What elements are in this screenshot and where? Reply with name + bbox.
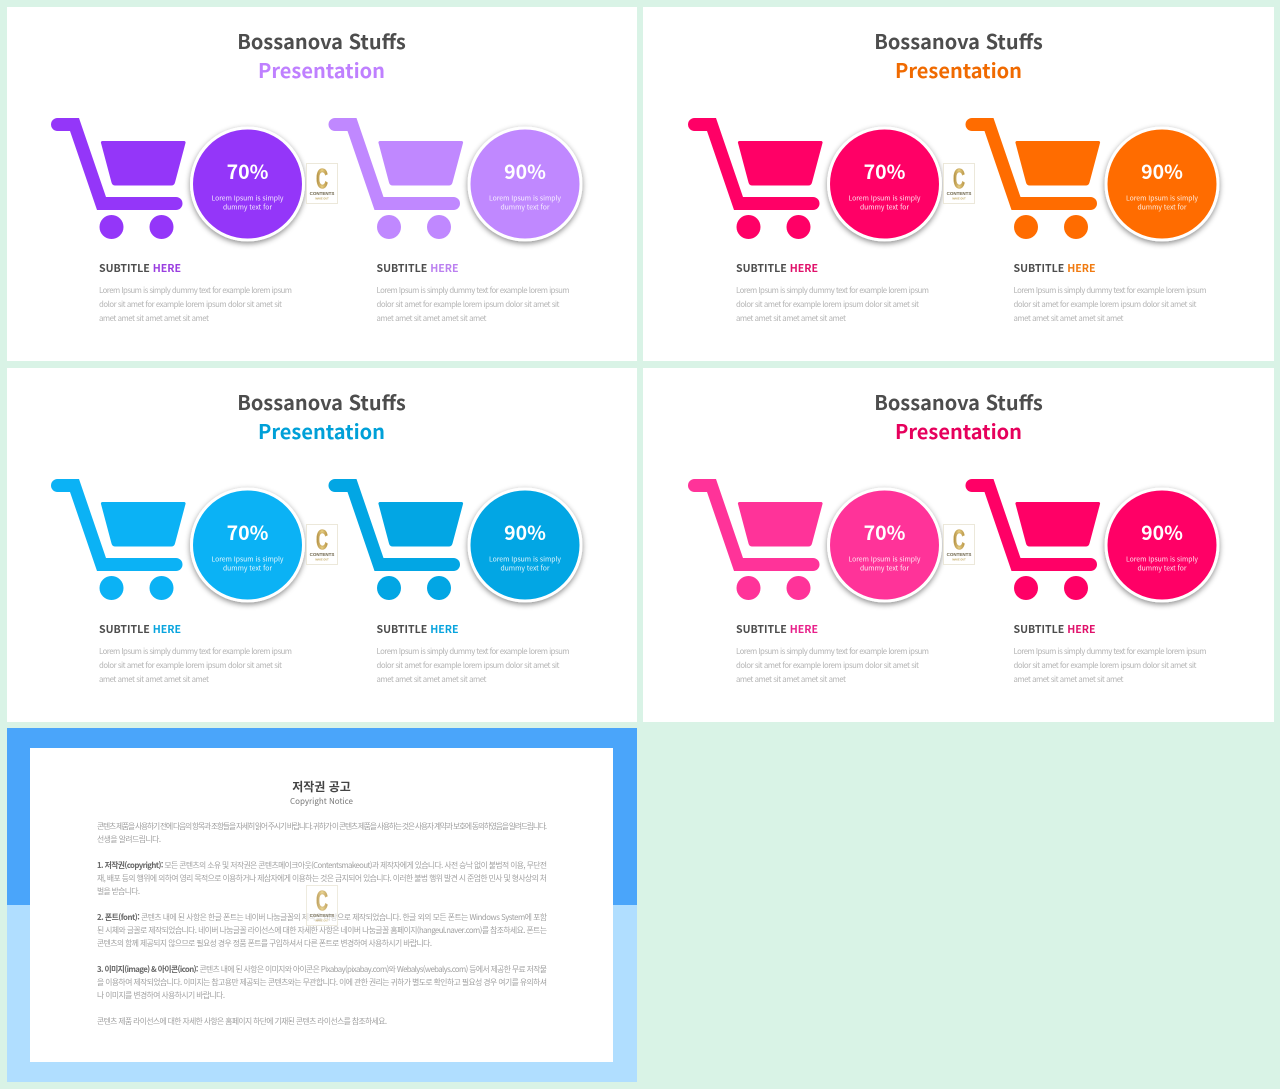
body text 1: Lorem Ipsum is simply dummy text for example lorem ipsum — [736, 285, 929, 296]
body text 2: dolor sit amet for example lorem ipsum dolor sit amet sit — [1014, 660, 1197, 671]
logo: MAKE OUT — [315, 198, 329, 200]
subheading 1: SUBTITLE HERE — [99, 622, 181, 637]
circle: 70%: dummy text for — [860, 562, 909, 572]
subheading 2: SUBTITLE HERE — [376, 622, 459, 637]
notice section 3: 나 이미지를 변경하여 사용하시기 바랍니다. — [97, 990, 225, 1001]
logo: C — [953, 163, 965, 194]
notice footer: 콘텐츠 제품 라이선스에 대한 자세한 사항은 홈페이지 하단에 기재된 콘텐츠 라이선스를 참조하세요. — [97, 1016, 387, 1027]
circle: 70%: 70% — [864, 517, 906, 546]
notice section 2: 콘텐츠의 함께 제공되지 않으므로 필요성 경우 정품 폰트를 구입하셔서 다른 폰트로 변경하여 사용하시기 바랍니다. — [97, 938, 432, 949]
notice section 1: 벌을 받습니다. — [97, 886, 140, 897]
icon: cart 1 — [51, 479, 186, 600]
notice section 1 — [97, 860, 547, 897]
body text 2: amet amet sit amet amet sit amet — [1014, 313, 1124, 324]
body text 2: amet amet sit amet amet sit amet — [376, 313, 487, 324]
body text 1: dolor sit amet for example lorem ipsum dolor sit amet sit — [736, 660, 919, 671]
body text 2 — [1014, 285, 1206, 324]
icon: cart 1 — [51, 118, 186, 239]
circle: 70%: 70% — [227, 517, 269, 546]
icon: cart 2 — [966, 118, 1100, 239]
notice section 2: 2. 폰트(font): 콘텐츠 내에 된 사항은 한글 폰트는 네이버 나눔글꼴의 제작을 바탕으로 제작되었습니다. 한글 외의 모든 폰트는 Windows System에 포함 — [97, 912, 547, 923]
body text 2: Lorem Ipsum is simply dummy text for example lorem ipsum — [1014, 646, 1206, 657]
title: Bossanova Stuffs — [237, 387, 406, 416]
circle: 90%: 90% — [504, 156, 546, 185]
logo: CONTENTS — [947, 191, 971, 196]
circle: 70%: Lorem Ipsum is simply — [212, 192, 284, 202]
circle: 70%: Lorem Ipsum is simply — [212, 554, 284, 564]
circle: 90%: Lorem Ipsum is simply — [489, 192, 561, 202]
logo: C — [316, 524, 328, 555]
body text 1: dolor sit amet for example lorem ipsum dolor sit amet sit — [736, 299, 919, 310]
title: Bossanova Stuffs — [237, 26, 406, 55]
logo — [306, 524, 338, 564]
circle: 70% — [190, 126, 305, 242]
panel: copyright notice — [7, 728, 637, 1082]
circle: 90%: dummy text for — [1137, 202, 1187, 212]
title: Bossanova Stuffs — [874, 26, 1043, 55]
subtitle: Presentation — [895, 55, 1022, 84]
circle: 70%: Lorem Ipsum is simply — [849, 192, 921, 202]
subheading 1: SUBTITLE HERE — [736, 622, 818, 637]
circle: 90%: dummy text for — [500, 562, 550, 572]
circle: 70%: 70% — [864, 156, 906, 185]
circle: 70% — [190, 488, 305, 602]
panel: pink and orange slide — [643, 7, 1274, 361]
logo — [944, 524, 974, 564]
notice section 2: 된 시체와 글꼴로 제작되었습니다. 네이버 나눔글꼴 라이선스에 대한 자세한 사항은 네이버 나눔글꼴 홈페이지(hangeul.naver.com)를 참조하세요. 폰트는 — [97, 925, 547, 936]
logo — [944, 163, 974, 204]
notice intro: 콘텐츠 제품을 사용하기 전에 다음의 항목과 조항들을 자세히 읽어 주시기 바랍니다. 귀하가 이 콘텐츠 제품을 사용하는 것은 사용자 계약과 보호에 동의하였음을 알려드립니다. — [97, 821, 547, 832]
circle: 70% — [827, 126, 942, 242]
logo: CONTENTS — [310, 913, 334, 918]
logo: C — [316, 885, 328, 916]
notice section 3: 을 이용하여 제작되었습니다. 이미지는 참고용만 제공되는 콘텐츠와는 무관합니다. 이에 관한 권리는 귀하가 별도로 확인하고 필요성 경우 여기를 유의하셔 — [97, 977, 547, 988]
subheading 2: SUBTITLE HERE — [1014, 622, 1096, 637]
circle: 90% — [468, 488, 582, 602]
body text 1 — [99, 646, 292, 685]
body text 2: Lorem Ipsum is simply dummy text for example lorem ipsum — [1014, 285, 1206, 296]
logo — [306, 163, 338, 204]
circle: 90%: 90% — [504, 517, 546, 546]
circle: 70% — [827, 488, 942, 602]
body text 1: amet amet sit amet amet sit amet — [99, 313, 209, 324]
circle: 90%: Lorem Ipsum is simply — [1126, 554, 1198, 564]
panel: purple slide — [7, 7, 637, 361]
body text 1 — [736, 646, 929, 685]
body text 2 — [1014, 646, 1206, 685]
panel: blue slide — [7, 368, 637, 722]
body text 2: dolor sit amet for example lorem ipsum dolor sit amet sit — [376, 299, 560, 310]
notice intro: 선생을 알려드립니다. — [97, 834, 161, 845]
subheading 1: SUBTITLE HERE — [736, 261, 818, 276]
icon: cart 1 — [688, 118, 823, 239]
body text 1 — [736, 285, 929, 324]
circle: 70%: dummy text for — [860, 202, 909, 212]
notice section 1: 재, 배포 등의 행위에 의하여 영리 목적으로 이용하거나 제삼자에게 이용하는 것은 금지되어 있습니다. 이러한 불법 행위 발견 시 준엄한 민사 및 형사상의 처 — [97, 873, 547, 884]
body text 2: Lorem Ipsum is simply dummy text for example lorem ipsum — [376, 646, 570, 657]
circle: 90% — [468, 126, 582, 242]
body text 1: amet amet sit amet amet sit amet — [736, 674, 846, 685]
circle: 90%: dummy text for — [500, 202, 550, 212]
body text 1 — [99, 285, 292, 324]
logo — [306, 885, 338, 926]
body text 1: amet amet sit amet amet sit amet — [736, 313, 846, 324]
circle: 70%: Lorem Ipsum is simply — [849, 554, 921, 564]
circle: 70%: dummy text for — [223, 562, 272, 572]
notice section 1: 1. 저작권(copyright): 모든 콘텐츠의 소유 및 저작권은 콘텐츠메이크아웃(Contentsmakeout)과 제작자에게 있습니다. 사전 승낙 없이 불법적 이용, 무단전 — [97, 860, 547, 871]
subtitle: Presentation — [895, 416, 1022, 445]
icon: cart 2 — [328, 118, 463, 239]
logo: C — [953, 524, 965, 555]
body text 2 — [376, 285, 570, 324]
body text 2: dolor sit amet for example lorem ipsum dolor sit amet sit — [1014, 299, 1197, 310]
body text 1: dolor sit amet for example lorem ipsum dolor sit amet sit — [99, 299, 282, 310]
logo: MAKE OUT — [952, 198, 966, 200]
body text 1: Lorem Ipsum is simply dummy text for example lorem ipsum — [99, 646, 292, 657]
circle: 70%: 70% — [227, 156, 269, 185]
circle: 90%: Lorem Ipsum is simply — [489, 554, 561, 564]
icon: cart 2 — [328, 479, 463, 600]
subheading 1: SUBTITLE HERE — [99, 261, 181, 276]
notice subheading: Copyright Notice — [290, 796, 354, 807]
panel: hot pink slide — [643, 368, 1274, 722]
circle: 90%: 90% — [1141, 156, 1183, 185]
body text 2 — [376, 646, 570, 685]
notice section 2 — [97, 912, 547, 949]
logo: CONTENTS — [947, 552, 971, 557]
notice intro — [97, 821, 547, 845]
body text 1: Lorem Ipsum is simply dummy text for example lorem ipsum — [736, 646, 929, 657]
subheading 2: SUBTITLE HERE — [376, 261, 459, 276]
logo: CONTENTS — [310, 552, 334, 557]
body text 1: Lorem Ipsum is simply dummy text for example lorem ipsum — [99, 285, 292, 296]
icon: cart 2 — [966, 479, 1100, 600]
notice section 3 — [97, 964, 547, 1001]
circle: 90%: dummy text for — [1137, 562, 1187, 572]
subheading 2: SUBTITLE HERE — [1014, 261, 1096, 276]
circle: 90% — [1104, 126, 1220, 242]
logo: CONTENTS — [310, 191, 334, 196]
body text 1: amet amet sit amet amet sit amet — [99, 674, 209, 685]
circle: 90% — [1104, 488, 1220, 602]
logo: MAKE OUT — [315, 920, 329, 922]
circle: 70%: dummy text for — [223, 202, 272, 212]
body text 2: dolor sit amet for example lorem ipsum dolor sit amet sit — [376, 660, 560, 671]
body text 2: amet amet sit amet amet sit amet — [376, 674, 487, 685]
body text 2: Lorem Ipsum is simply dummy text for example lorem ipsum — [376, 285, 570, 296]
icon: cart 1 — [688, 479, 823, 600]
circle: 90%: Lorem Ipsum is simply — [1126, 192, 1198, 202]
notice heading: 저작권 공고 — [292, 778, 351, 795]
logo: MAKE OUT — [952, 558, 966, 562]
subtitle: Presentation — [258, 55, 385, 84]
notice section 3: 3. 이미지(image) & 아이콘(icon): 콘텐츠 내에 된 사항은 이미지와 아이콘은 Pixabay(pixabay.com)와 Webalys(webalys.com) 등에서 제공한 무료 저작물 — [97, 964, 547, 975]
body text 1: dolor sit amet for example lorem ipsum dolor sit amet sit — [99, 660, 282, 671]
circle: 90%: 90% — [1141, 517, 1183, 546]
logo: MAKE OUT — [315, 558, 329, 562]
title: Bossanova Stuffs — [874, 387, 1043, 416]
subtitle: Presentation — [258, 416, 385, 445]
body text 2: amet amet sit amet amet sit amet — [1014, 674, 1124, 685]
logo: C — [316, 163, 328, 194]
